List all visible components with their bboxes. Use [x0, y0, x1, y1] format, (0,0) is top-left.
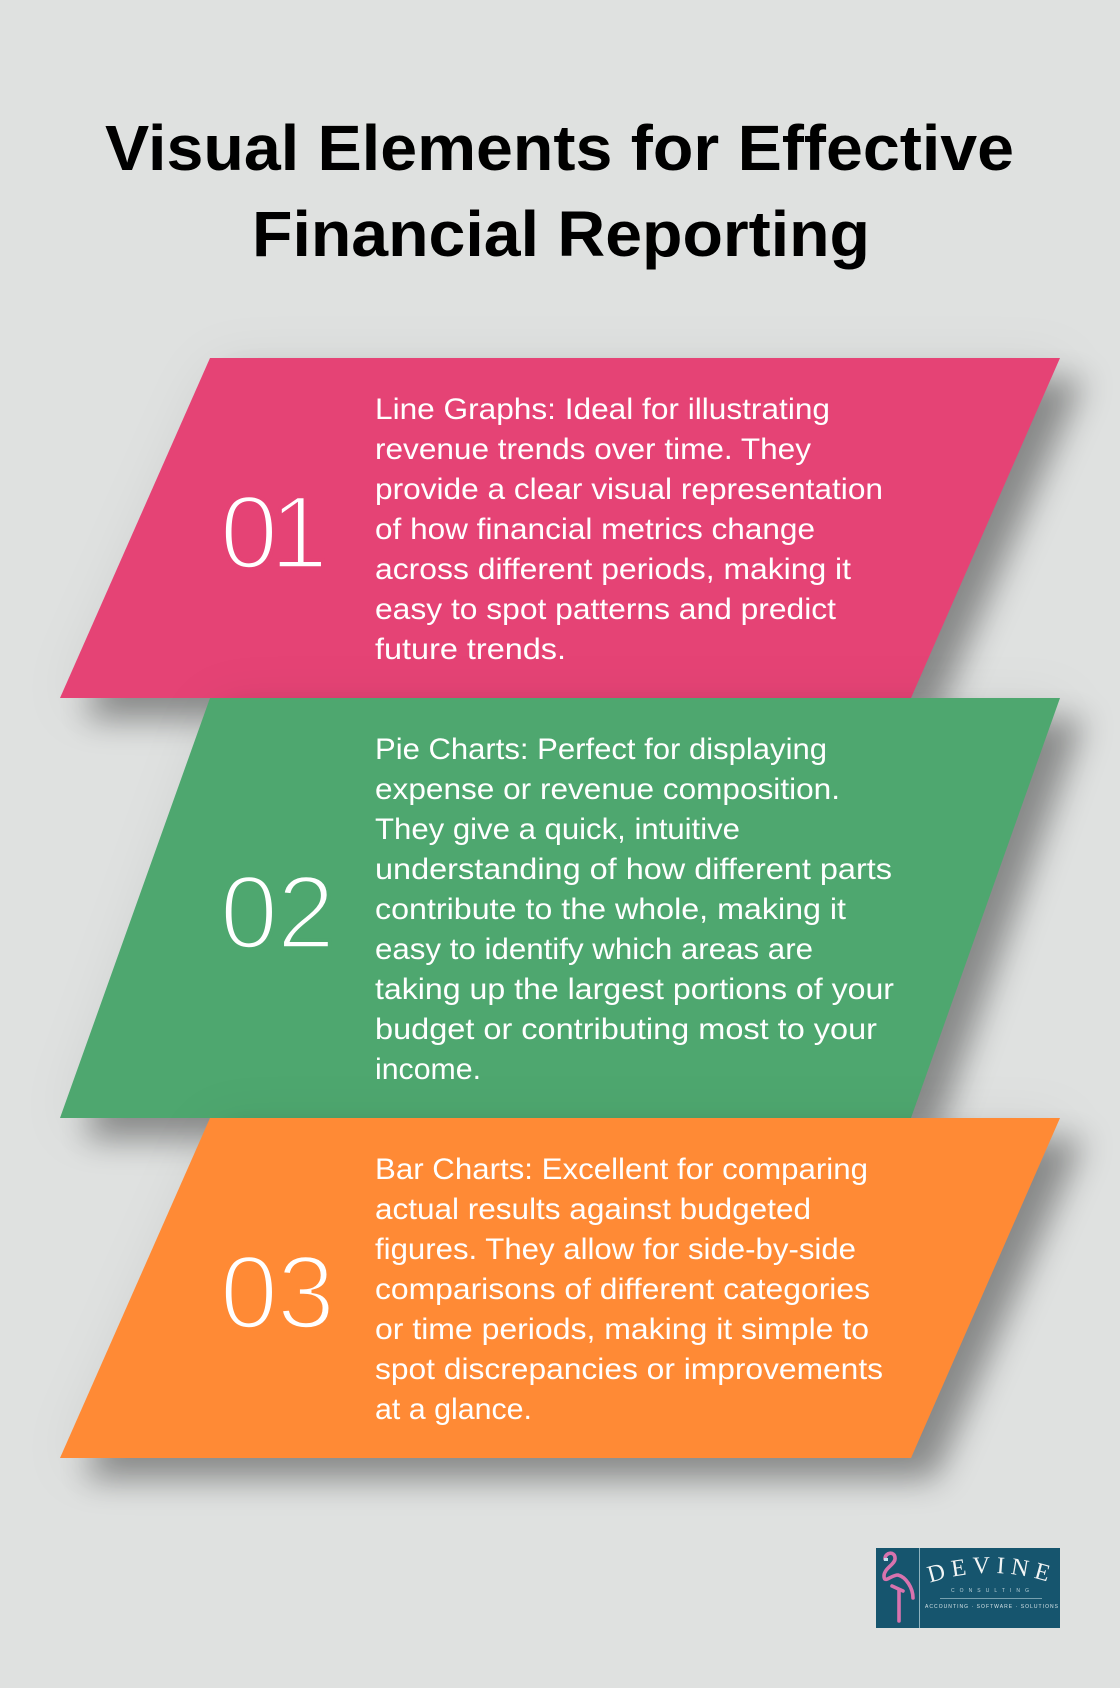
green parallelogram	[60, 698, 1060, 1118]
text: line graphs: future trends.	[375, 633, 566, 666]
text: bar charts: Bar Charts: Excellent for comparing	[375, 1153, 868, 1186]
text: line graphs	[375, 393, 883, 666]
panel: 03 bar charts	[60, 1118, 1060, 1458]
text: line graphs: of how financial metrics change	[375, 513, 815, 546]
text: pie charts: understanding of how different parts	[375, 853, 892, 886]
icon: flamingo	[884, 1553, 913, 1621]
text: line graphs: easy to spot patterns and predict	[375, 593, 836, 626]
logo wordmark	[930, 1573, 1052, 1583]
logo: Devine Consulting: ACCOUNTING · SOFTWARE · SOLUTIONS	[925, 1604, 1059, 1610]
text: pie charts: easy to identify which areas are	[375, 933, 813, 966]
text: bar charts: actual results against budgeted	[375, 1193, 811, 1226]
text: bar charts: comparisons of different categories	[375, 1273, 870, 1306]
text: pie charts: income.	[375, 1053, 481, 1086]
text: bar charts: spot discrepancies or improvements	[375, 1353, 883, 1386]
text: bar charts	[375, 1153, 883, 1426]
title: Financial Reporting	[252, 198, 870, 270]
text: pie charts: Pie Charts: Perfect for displaying	[375, 733, 827, 766]
number 01: 01	[220, 475, 328, 591]
text: bar charts: at a glance.	[375, 1393, 532, 1426]
pink parallelogram	[60, 358, 1060, 698]
text: line graphs: provide a clear visual representation	[375, 473, 883, 506]
text: pie charts: taking up the largest portions of your	[375, 973, 894, 1006]
text: line graphs: revenue trends over time. They	[375, 433, 811, 466]
text: pie charts: expense or revenue composition.	[375, 773, 840, 806]
title: Visual Elements for Effective	[105, 112, 1014, 184]
number 03: 03	[220, 1235, 335, 1351]
logo: Devine Consulting	[876, 1548, 1060, 1628]
orange parallelogram	[60, 1118, 1060, 1458]
title	[105, 112, 1014, 270]
logo: Devine Consulting: DEVINE	[926, 1557, 1050, 1582]
text: pie charts: budget or contributing most to your	[375, 1013, 877, 1046]
panel: 02 pie charts	[60, 698, 1060, 1118]
text: line graphs: across different periods, making it	[375, 553, 851, 586]
panel: 01 line graphs	[60, 358, 1060, 698]
text: pie charts	[375, 733, 894, 1086]
text: pie charts: contribute to the whole, making it	[375, 893, 846, 926]
text: line graphs: Line Graphs: Ideal for illustrating	[375, 393, 830, 426]
logo: Devine Consulting: CONSULTING	[951, 1588, 1029, 1594]
text: bar charts: figures. They allow for side-by-side	[375, 1233, 856, 1266]
text: bar charts: or time periods, making it simple to	[375, 1313, 869, 1346]
text: pie charts: They give a quick, intuitive	[375, 813, 740, 846]
number 02: 02	[220, 855, 335, 971]
